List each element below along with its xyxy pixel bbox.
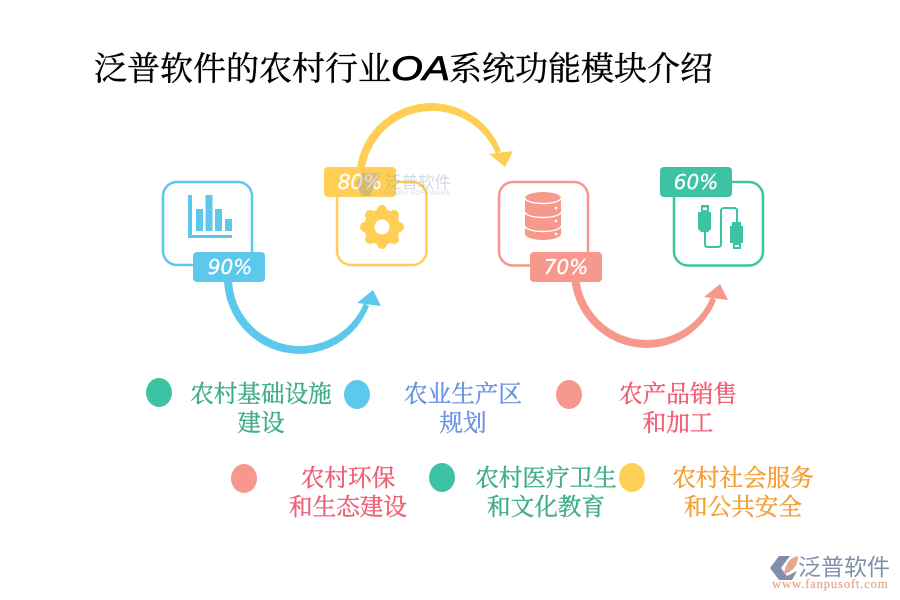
legend text: 农业生产区规划	[404, 381, 522, 437]
legend text: 农村环保和生态建设: 和生态建设	[289, 495, 407, 521]
legend text: 农村基础设施建设: 建设	[237, 411, 285, 437]
legend dot: salmon 2	[231, 464, 257, 493]
badge: 60%: 60%	[674, 170, 718, 194]
legend text: 农产品销售和加工: 和加工	[643, 411, 713, 437]
watermark: 泛普软件	[385, 173, 451, 192]
badge: 80%: 80%	[338, 170, 382, 194]
legend text: 农产品销售和加工: 农产品销售	[619, 382, 737, 408]
legend text: 农村基础设施建设	[190, 382, 332, 437]
legend dot: yellow	[619, 463, 645, 492]
title: OA	[391, 50, 450, 88]
legend text: 农村医疗卫生和文化教育: 和文化教育	[487, 495, 605, 521]
logo: fanpu software: 泛普软件	[798, 554, 890, 580]
badge: 70%: 70%	[544, 255, 588, 279]
legend text: 农村医疗卫生和文化教育: 农村医疗卫生	[475, 466, 617, 492]
legend dot: green	[146, 378, 172, 407]
legend text: 农村环保和生态建设	[289, 466, 407, 521]
logo: fanpu software	[770, 554, 890, 591]
legend text: 农业生产区规划: 农业生产区	[404, 382, 522, 408]
legend dot: green 2	[429, 463, 455, 492]
watermark	[356, 173, 451, 197]
legend text: 农村社会服务和公共安全: 和公共安全	[684, 495, 802, 521]
badge: 70%	[530, 252, 602, 282]
arrow: salmon curve	[571, 272, 728, 348]
watermark: FANPU SOFTWARE	[384, 190, 451, 197]
icon: usb cable	[698, 205, 743, 249]
legend text: 农村医疗卫生和文化教育	[475, 466, 617, 521]
badge: 90%: 90%	[208, 255, 252, 279]
icon: gear	[360, 205, 404, 249]
badge: 80%	[324, 167, 396, 197]
legend dot: salmon	[556, 380, 582, 409]
icon: bar chart	[188, 195, 232, 238]
arrow: yellow curve	[356, 103, 513, 179]
legend text: 农业生产区规划: 规划	[439, 411, 487, 437]
badge: 90%	[193, 252, 265, 282]
legend text: 农村环保和生态建设: 农村环保	[301, 466, 395, 492]
card: chart module	[163, 182, 252, 265]
arrow: blue curve	[224, 278, 381, 354]
card: gear module	[337, 182, 426, 265]
legend dot: blue	[344, 380, 370, 409]
card: database module	[499, 182, 588, 266]
logo: fanpu software: www.fanpusoft.com	[772, 577, 888, 591]
icon: database	[525, 192, 561, 240]
legend text: 农村社会服务和公共安全	[672, 465, 814, 521]
title: 泛普软件的农村行业 系统功能模块介绍	[94, 52, 713, 88]
badge: 60%	[660, 167, 732, 197]
card: cable module	[674, 182, 763, 266]
legend text: 农村基础设施建设: 农村基础设施	[190, 382, 332, 408]
legend text: 农产品销售和加工	[619, 381, 737, 437]
legend text: 农村社会服务和公共安全: 农村社会服务	[672, 466, 814, 492]
